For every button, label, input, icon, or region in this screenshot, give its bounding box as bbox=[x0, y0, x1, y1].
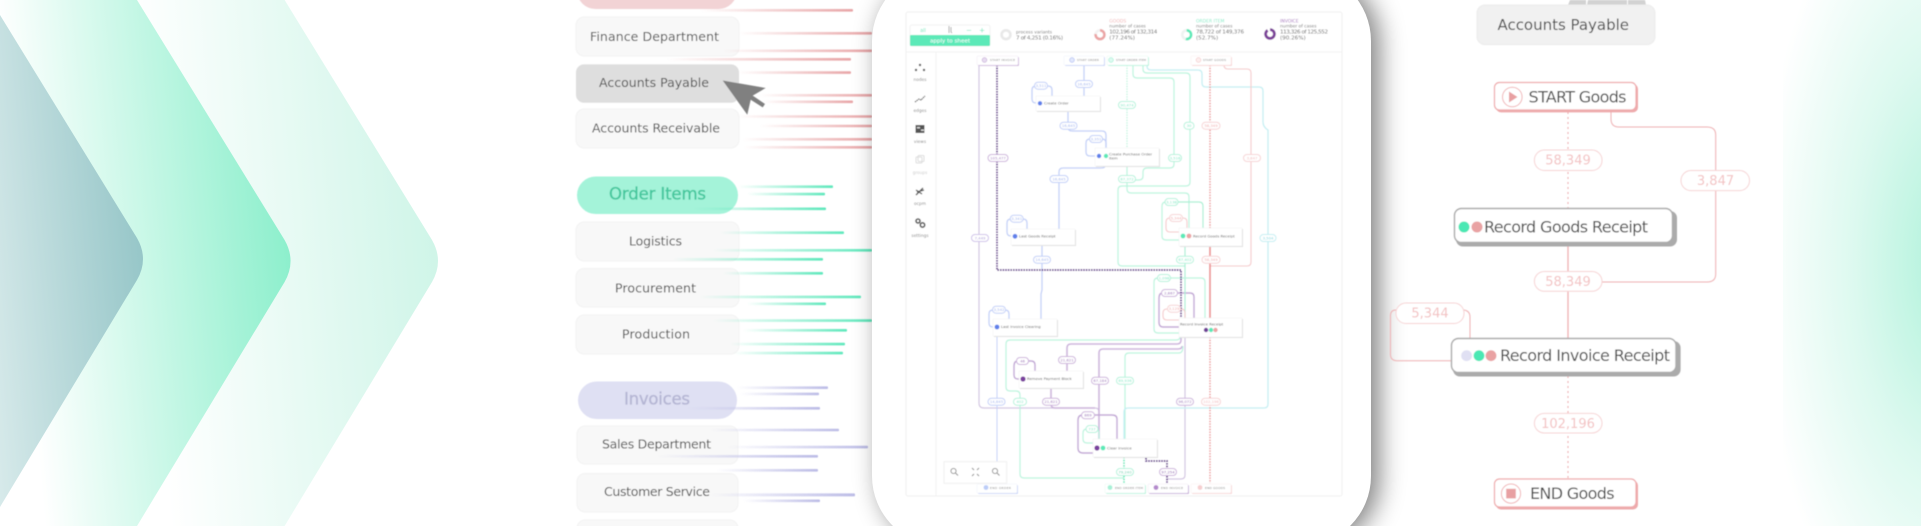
activity nodes bbox=[993, 96, 1243, 458]
sidebar navigation: ocpm bbox=[914, 202, 926, 207]
dark purple dotted edges bbox=[997, 65, 1181, 483]
cyan edge bbox=[1124, 65, 1268, 439]
edge count pills: 3,516 bbox=[1170, 155, 1181, 160]
edge count pills: 67,372 bbox=[1120, 176, 1134, 181]
stat: goods: number of cases bbox=[1109, 24, 1147, 30]
edge count pills: 869 bbox=[1084, 413, 1092, 418]
node: START GOODS: START GOODS bbox=[1203, 58, 1226, 62]
stat: goods: GOODS bbox=[1109, 18, 1126, 24]
edge count pills: 67,184 bbox=[1093, 378, 1107, 383]
item: Procurement bbox=[576, 268, 739, 307]
edge count pills: 97,254 bbox=[1161, 469, 1175, 474]
activity: Record Invoice Receipt: Record Invoice Receipt bbox=[1180, 321, 1224, 326]
sidebar navigation: views bbox=[914, 139, 927, 145]
item: Sales Department: Sales Department bbox=[602, 436, 711, 452]
count: 58,349 top: 58,349 bbox=[1545, 154, 1591, 169]
sidebar navigation: nodes bbox=[914, 77, 927, 83]
sidebar navigation: groups bbox=[913, 170, 928, 176]
icon: cursor arrow bbox=[723, 80, 766, 115]
flow edges bbox=[1390, 112, 1716, 478]
node: END INVOICE bbox=[1148, 484, 1189, 494]
node: END GOODS bbox=[1191, 484, 1232, 494]
activity: Remove Payment Block bbox=[1019, 371, 1084, 389]
node: Record Goods Receipt: Record Goods Receipt bbox=[1484, 218, 1648, 236]
icon: edges bbox=[915, 96, 925, 102]
node: END ORDER ITEM: END ORDER ITEM bbox=[1115, 486, 1143, 490]
edge count pills: 3,341 bbox=[1011, 216, 1023, 221]
node: START INVOICE: START INVOICE bbox=[990, 58, 1015, 62]
heading box: Accounts Payable bbox=[1477, 5, 1655, 45]
item: Production: Production bbox=[622, 326, 690, 342]
node: START ORDER: START ORDER bbox=[1077, 58, 1099, 62]
edge count pills: 16,645 bbox=[1077, 81, 1091, 86]
activity: Create Purchase Order Item: Create Purchase Order bbox=[1109, 152, 1153, 156]
icon: play bbox=[1502, 87, 1522, 107]
count: 102,196: 102,196 bbox=[1541, 417, 1595, 432]
header tabs bbox=[1568, 0, 1646, 5]
edge count pills bbox=[972, 80, 1276, 476]
node: START ORDER bbox=[1064, 56, 1105, 66]
blue edges bbox=[989, 65, 1106, 483]
edge count pills: 3,847 bbox=[1247, 155, 1258, 160]
edge count pills: 7,449 bbox=[975, 235, 986, 240]
green pills bbox=[1014, 102, 1276, 476]
node: END ORDER ITEM bbox=[1105, 484, 1146, 494]
count: 3,847 bbox=[1681, 170, 1750, 191]
edge count pills: 69,936 bbox=[1118, 378, 1132, 383]
activity: Clear Invoice: Clear Invoice bbox=[1107, 445, 1132, 450]
category pill: Order Items: Order Items bbox=[609, 185, 706, 204]
item: Accounts Payable selected bbox=[576, 64, 739, 103]
icon: fit view bbox=[972, 468, 979, 476]
edge count pills: 102,196 bbox=[1203, 399, 1219, 404]
node: END ORDER: END ORDER bbox=[990, 486, 1011, 490]
edge count pills: 14,645 bbox=[1035, 257, 1049, 262]
item: Accounts Payable selected: Accounts Payable bbox=[599, 75, 709, 90]
edge count pills: 1,098 bbox=[1159, 275, 1170, 280]
pink pills bbox=[1168, 122, 1260, 405]
icon: groups bbox=[916, 156, 924, 163]
edge count pills: 3,351 bbox=[1091, 136, 1102, 141]
sidebar navigation: edges bbox=[914, 108, 927, 114]
chevron: light bbox=[0, 0, 438, 526]
item: cropped entry bbox=[577, 520, 738, 526]
map edges bbox=[979, 65, 1268, 483]
edge count pills: 16,645 bbox=[1062, 123, 1076, 128]
stat: goods: 102,196 of 132,314 bbox=[1109, 30, 1158, 36]
chevron: mint bbox=[0, 0, 291, 526]
edge count pills: 46 bbox=[1020, 358, 1025, 363]
activity: Create Order bbox=[1036, 96, 1101, 112]
zoom controls bbox=[944, 462, 1007, 483]
chevron: teal bbox=[0, 15, 143, 507]
activity: Record Goods Receipt: Record Goods Receipt bbox=[1193, 234, 1235, 238]
purple pills bbox=[972, 154, 1194, 476]
activity: Record Invoice Receipt bbox=[1179, 318, 1243, 338]
edge count pills: 58,349 bbox=[1204, 123, 1218, 128]
activity: Create Purchase Order Item bbox=[1095, 148, 1160, 167]
category pill: Order Items bbox=[577, 176, 738, 214]
edge count pills: 21,621 bbox=[1044, 399, 1058, 404]
process map screenshot bbox=[906, 12, 1342, 496]
node: Record Goods Receipt bbox=[1454, 208, 1677, 246]
node: START GOODS bbox=[1191, 56, 1232, 66]
count: 58,349 middle bbox=[1534, 272, 1602, 291]
edge count pills: 5,344 bbox=[1171, 215, 1182, 220]
stat: order item: ORDER ITEM bbox=[1196, 18, 1224, 24]
node: END ORDER bbox=[977, 484, 1018, 494]
order item bars bbox=[673, 185, 872, 354]
edge count pills: 3,138 bbox=[1166, 199, 1178, 204]
sidebar navigation bbox=[911, 64, 929, 239]
icon: zoom in bbox=[951, 468, 958, 476]
edge count pills: 3,511 bbox=[1036, 83, 1047, 88]
edge count pills: 3,129 bbox=[1169, 306, 1180, 311]
activity: Clear Invoice bbox=[1093, 439, 1158, 458]
count: 3,847: 3,847 bbox=[1697, 174, 1734, 189]
item: Logistics: Logistics bbox=[629, 234, 682, 248]
edge count pills: 2,867 bbox=[1164, 290, 1176, 295]
edge count pills: 79,240 bbox=[1118, 469, 1132, 474]
green edges bbox=[1006, 65, 1205, 483]
stat: invoice: INVOICE bbox=[1280, 18, 1299, 24]
stat: process variants: process variants bbox=[1016, 30, 1053, 36]
node: END GOODS: END GOODS bbox=[1205, 486, 1225, 490]
edge count pills: 3,542 bbox=[994, 307, 1005, 312]
goods bars bbox=[667, 9, 872, 149]
icon: ocpm bbox=[916, 188, 924, 195]
item: Accounts Receivable bbox=[576, 109, 739, 148]
stat: process variants bbox=[1002, 30, 1063, 42]
node: START Goods: START Goods bbox=[1528, 88, 1626, 106]
sidebar navigation: settings bbox=[911, 233, 929, 239]
category pill: goods (cropped) bbox=[577, 0, 737, 9]
category pill: Invoices: Invoices bbox=[624, 390, 690, 409]
edge count pills: 737 bbox=[1088, 426, 1096, 431]
stat: goods: (77.24%) bbox=[1109, 36, 1135, 42]
stat: invoice: number of cases bbox=[1280, 24, 1317, 30]
node: START INVOICE bbox=[977, 56, 1019, 66]
edge count pills: 21,621 bbox=[1060, 357, 1074, 362]
count: 102,196 bbox=[1534, 413, 1602, 433]
item: Logistics bbox=[576, 222, 739, 261]
edge count pills: 14,845 bbox=[990, 399, 1004, 404]
icon: stop bbox=[1501, 484, 1521, 503]
category pill: Invoices bbox=[578, 382, 737, 419]
count: 58,349 top bbox=[1534, 150, 1602, 170]
invoice bars bbox=[657, 386, 868, 502]
node: END INVOICE: END INVOICE bbox=[1161, 486, 1183, 490]
edge count pills: 105,477 bbox=[990, 155, 1006, 160]
edge count pills: 402 bbox=[1016, 399, 1024, 404]
count: 5,344: 5,344 bbox=[1411, 307, 1449, 322]
activity: Last Invoice Clearing: Last Invoice Clearing bbox=[1001, 324, 1041, 329]
edge count pills: 3,504 bbox=[1263, 235, 1274, 240]
icon: nodes bbox=[915, 64, 925, 71]
item: Customer Service: Customer Service bbox=[604, 484, 710, 499]
node: START ORDER ITEM bbox=[1107, 56, 1149, 66]
filter control: apply to sheet bbox=[930, 38, 971, 44]
filter control bbox=[910, 25, 990, 46]
purple edges bbox=[979, 65, 1194, 479]
edge count pills: 58,349 bbox=[1204, 257, 1218, 262]
right background glow bbox=[1783, 0, 1921, 526]
edge count pills: 16,645 bbox=[1052, 176, 1066, 181]
stat: order item: number of cases bbox=[1196, 24, 1233, 30]
stat: invoice: 113,326 of 125,552 bbox=[1280, 30, 1328, 36]
item: Finance Department: Finance Department bbox=[590, 29, 719, 44]
stat: process variants: 7 of 4,251 (0.16%) bbox=[1016, 36, 1063, 42]
icon: zoom out bbox=[992, 468, 1000, 476]
icon: settings bbox=[916, 219, 925, 227]
pink edges bbox=[1163, 65, 1251, 483]
stat: order item: 78,722 of 149,376 bbox=[1196, 30, 1244, 36]
node: Record Invoice Receipt bbox=[1452, 338, 1681, 376]
count: 58,349 middle: 58,349 bbox=[1545, 275, 1591, 290]
activity: Last Goods Receipt: Last Goods Receipt bbox=[1019, 234, 1056, 239]
item: Production bbox=[576, 315, 739, 354]
node: END Goods bbox=[1494, 479, 1638, 510]
stat: invoice: (90.26%) bbox=[1280, 36, 1306, 42]
stat: order item: (52.7%) bbox=[1196, 36, 1218, 42]
activity: Remove Payment Block: Remove Payment Block bbox=[1027, 376, 1073, 381]
start and end nodes bbox=[977, 56, 1232, 494]
heading box: Accounts Payable: Accounts Payable bbox=[1498, 16, 1629, 34]
activity: Create Purchase Order Item: Item bbox=[1109, 156, 1118, 160]
activity: Record Goods Receipt bbox=[1179, 228, 1243, 247]
stat: order item bbox=[1182, 18, 1244, 42]
activity: Last Goods Receipt bbox=[1011, 229, 1076, 246]
filter control: + bbox=[979, 26, 985, 34]
activity: Last Invoice Clearing bbox=[993, 319, 1058, 337]
count: 5,344 bbox=[1396, 303, 1464, 324]
node: START Goods bbox=[1494, 82, 1638, 112]
node: END Goods: END Goods bbox=[1530, 484, 1615, 503]
icon: views bbox=[916, 125, 924, 133]
detail flow column bbox=[1390, 0, 1750, 510]
stat: invoice bbox=[1266, 18, 1328, 42]
node: Record Invoice Receipt: Record Invoice Receipt bbox=[1500, 346, 1670, 365]
item: Finance Department bbox=[576, 17, 739, 56]
item: Procurement: Procurement bbox=[615, 280, 696, 296]
main panel bbox=[872, 0, 1371, 526]
stat: goods bbox=[1096, 18, 1158, 42]
item: Accounts Receivable: Accounts Receivable bbox=[592, 120, 720, 136]
edge count pills: 67,402 bbox=[1178, 257, 1192, 262]
item: Customer Service bbox=[577, 474, 738, 512]
blue pills bbox=[988, 80, 1102, 405]
item: Sales Department bbox=[577, 426, 738, 464]
department list column bbox=[576, 0, 872, 526]
filter control: − bbox=[966, 26, 972, 34]
activity: Create Order: Create Order bbox=[1044, 100, 1069, 106]
edge count pills: 96,072 bbox=[1178, 399, 1192, 404]
screenshot frame bbox=[906, 12, 1342, 496]
edge count pills: 30 bbox=[1187, 123, 1192, 128]
edge count pills: 90,474 bbox=[1120, 102, 1134, 107]
filter control: all bbox=[920, 28, 926, 34]
main panel shadow bbox=[880, 0, 1379, 526]
node: START ORDER ITEM: START ORDER ITEM bbox=[1116, 58, 1146, 62]
